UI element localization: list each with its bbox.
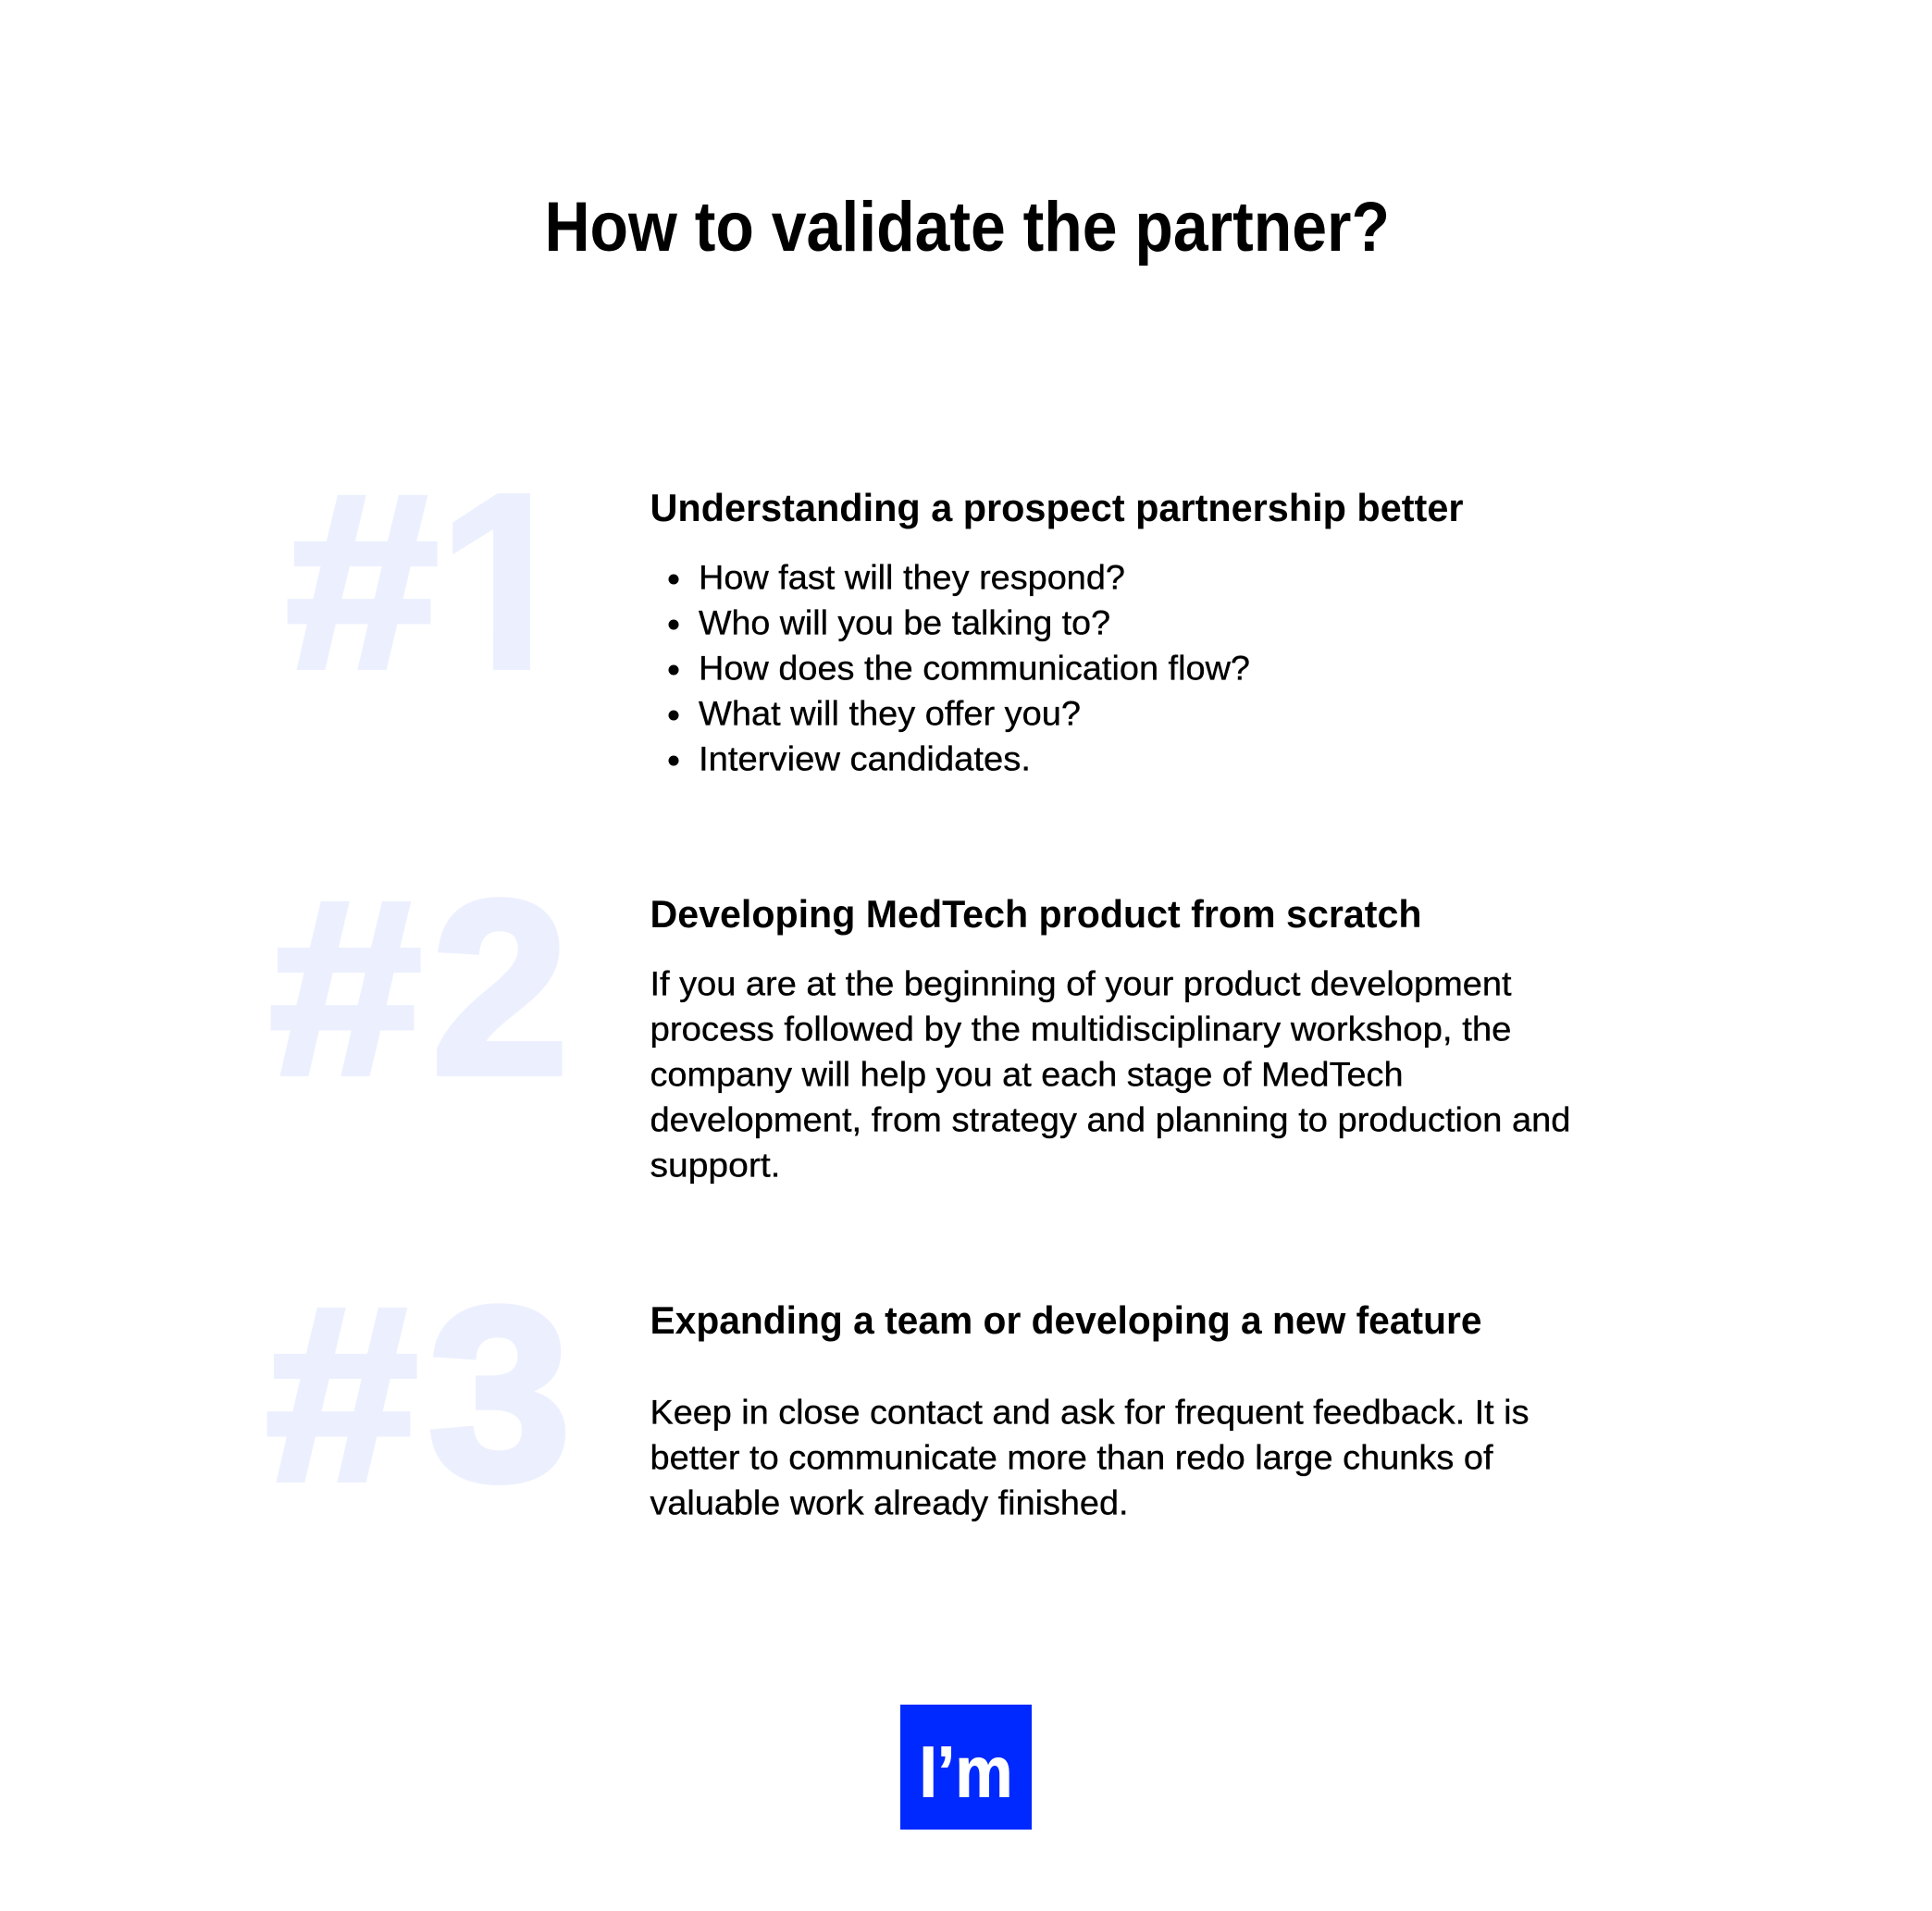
big number 2 bbox=[270, 850, 568, 1125]
paragraph: step 2: If you are at the beginning of your product development bbox=[650, 964, 1512, 1003]
heading: step 2: Developing MedTech product from scratch bbox=[650, 892, 1421, 936]
bullet list: step 1: Who will you be talking to? bbox=[699, 603, 1110, 642]
bullet list: step 1: What will they offer you? bbox=[699, 694, 1081, 733]
panel: step 3 bbox=[266, 1257, 1529, 1532]
big number 2: # bbox=[270, 850, 421, 1125]
logo bbox=[900, 1705, 1032, 1830]
big number 1: # bbox=[287, 444, 438, 719]
panel: step 1 bbox=[287, 492, 1463, 771]
bullet list: step 1 bbox=[668, 557, 1250, 777]
bullet list: step 1: How does the communication flow? bbox=[699, 648, 1250, 687]
paragraph: step 2: process followed by the multidisciplinary workshop, the bbox=[650, 1009, 1512, 1048]
paragraph: step 3: valuable work already finished. bbox=[650, 1483, 1129, 1521]
heading: step 3: Expanding a team or developing a new feature bbox=[650, 1298, 1482, 1342]
bullet list: step 1: Interview candidates. bbox=[699, 738, 1031, 777]
heading: step 1: Understanding a prospect partnership better bbox=[650, 486, 1464, 529]
paragraph: step 2 bbox=[650, 964, 1571, 1185]
paragraph: step 3: better to communicate more than redo large chunks of bbox=[650, 1438, 1493, 1477]
big number 1 bbox=[287, 493, 530, 670]
logo: I’m bbox=[920, 1731, 1012, 1812]
bullet list: step 1: How fast will they respond? bbox=[699, 557, 1125, 596]
big number 3 bbox=[266, 1257, 571, 1532]
paragraph: step 2: development, from strategy and planning to production and bbox=[650, 1099, 1571, 1138]
big number 3: # bbox=[266, 1257, 417, 1532]
big number 2: 2 bbox=[432, 850, 568, 1125]
big number 1: 1 bbox=[440, 444, 576, 719]
big number 3: 3 bbox=[428, 1257, 571, 1532]
title: How to validate the partner? bbox=[544, 188, 1390, 267]
paragraph: step 2: support. bbox=[650, 1146, 781, 1185]
paragraph: step 3: Keep in close contact and ask for frequent feedback. It is bbox=[650, 1392, 1529, 1431]
paragraph: step 2: company will help you at each stage of MedTech bbox=[650, 1055, 1403, 1094]
panel: step 2 bbox=[270, 850, 1571, 1185]
paragraph: step 3 bbox=[650, 1392, 1529, 1521]
